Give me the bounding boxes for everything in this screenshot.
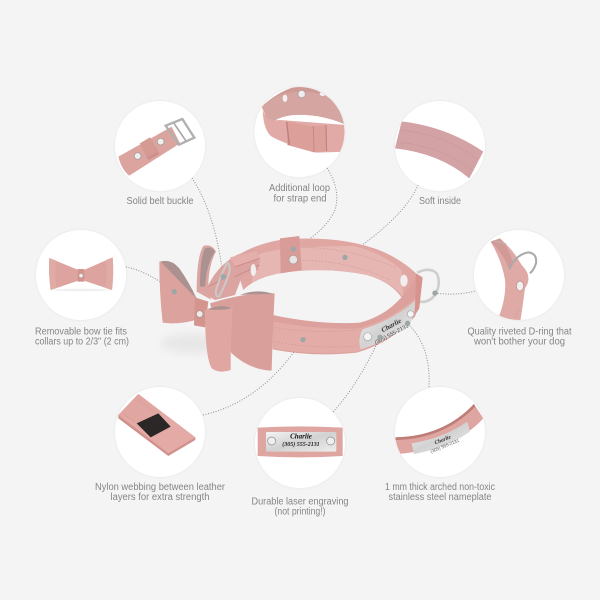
panel: D-ring	[474, 230, 564, 323]
label: D-ring	[468, 326, 572, 348]
back strap	[233, 239, 419, 307]
circle	[395, 387, 485, 477]
collar shadow	[160, 333, 233, 353]
circle	[115, 101, 205, 191]
circle	[474, 230, 564, 320]
label: nylon webbing	[95, 482, 226, 503]
nylon image	[118, 394, 195, 456]
knot tab	[194, 297, 208, 327]
grey callout dots	[172, 246, 438, 342]
label: laser engraving: Durable laser engraving	[252, 496, 348, 508]
dotted leader lines	[126, 168, 476, 415]
circle	[395, 101, 485, 191]
label: belt buckle: Solid belt buckle	[126, 196, 194, 207]
label: laser engraving	[252, 496, 348, 518]
D-ring	[417, 270, 439, 302]
D-ring rivet	[415, 273, 423, 315]
panel: soft inside	[395, 101, 485, 191]
label: nameplate	[385, 482, 495, 503]
panel: nylon webbing	[115, 387, 205, 477]
label: nameplate: 1 mm thick arched non-toxic	[385, 482, 495, 493]
circle	[115, 387, 205, 477]
label: additional loop: Additional loop	[269, 183, 330, 194]
right back wing	[210, 293, 275, 371]
label: bow tie: collars up to 2/3" (2 cm)	[35, 336, 129, 348]
label: nylon webbing: layers for extra strength	[110, 492, 210, 503]
engraved plate image: Charlie	[290, 433, 312, 441]
loop image	[262, 85, 347, 153]
label: nameplate: stainless steel nameplate	[388, 492, 492, 503]
label: soft inside: Soft inside	[419, 196, 461, 207]
soft lining image	[395, 121, 483, 178]
label: bow tie	[35, 326, 129, 348]
label: laser engraving: (not printing!)	[274, 506, 326, 518]
panel: nameplate	[395, 387, 485, 477]
engraved plate image	[258, 426, 343, 457]
main collar with bow	[159, 236, 439, 372]
panel: belt buckle	[115, 101, 205, 191]
nameplate image	[395, 404, 483, 454]
engraved plate image: (305) 555-2131	[282, 441, 320, 448]
label: bow tie: Removable bow tie fits	[35, 326, 127, 338]
panel: bow tie	[36, 230, 126, 320]
buckle cluster	[206, 248, 261, 300]
label: D-ring: Quality riveted D-ring that	[468, 326, 572, 338]
nameplate image: (305) 555-2131	[430, 438, 460, 454]
panel: additional loop	[254, 85, 347, 177]
panel: laser engraving	[255, 398, 345, 488]
strap loop	[280, 236, 302, 273]
nameplate on collar: (305) 555-2131	[374, 323, 410, 346]
D-ring image	[491, 238, 536, 323]
right front wing	[205, 306, 233, 372]
back bow loop	[197, 245, 216, 300]
front strap	[273, 275, 422, 354]
circle	[36, 230, 126, 320]
bow tie image	[49, 257, 113, 291]
circle	[255, 398, 345, 488]
left wing	[159, 261, 197, 323]
buckle image	[118, 119, 194, 176]
nameplate on collar: Charlie	[380, 317, 403, 334]
label: additional loop	[269, 183, 330, 204]
label: D-ring: won't bother your dog	[473, 336, 565, 348]
nameplate on collar	[359, 301, 415, 349]
label: nylon webbing: Nylon webbing between leather	[95, 482, 226, 493]
circle	[254, 87, 344, 177]
bow tie	[159, 245, 275, 372]
label: additional loop: for strap end	[274, 194, 326, 204]
nameplate image: Charlie	[434, 434, 452, 446]
